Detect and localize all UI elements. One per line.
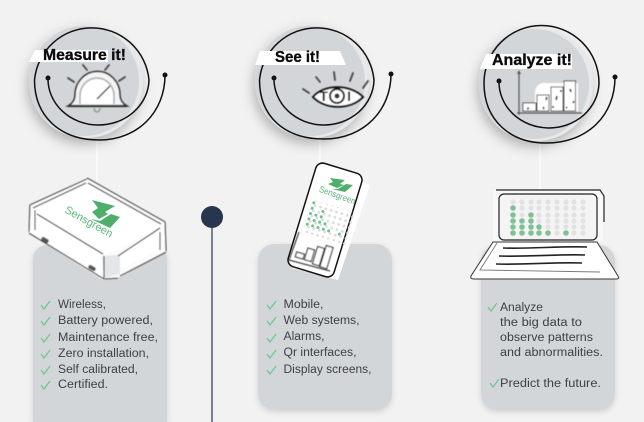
disc xyxy=(255,24,369,138)
mini bar chart xyxy=(289,232,333,271)
spiral arcs xyxy=(34,28,168,140)
box body xyxy=(28,178,166,280)
feature list: see: Display screens, xyxy=(284,364,372,376)
feature list: see: Qr interfaces, xyxy=(284,347,356,359)
icon: eye: I xyxy=(347,88,351,104)
title: Measure it! xyxy=(43,47,126,64)
title banner xyxy=(255,51,346,65)
device: sensor box xyxy=(28,178,166,280)
logo mark xyxy=(91,200,120,228)
icon: eye: T xyxy=(319,88,328,104)
panel: analyze card xyxy=(481,245,615,410)
feature list: see: Web systems, xyxy=(284,315,360,327)
title: See it! xyxy=(275,49,320,66)
feature list: measure: Battery powered, xyxy=(58,315,153,327)
feature list: measure: Certified. xyxy=(58,379,108,391)
see section header xyxy=(255,24,394,139)
analyze section header xyxy=(479,25,618,143)
icon: bar chart xyxy=(517,70,582,115)
device: laptop xyxy=(471,190,619,279)
panel: measure card xyxy=(33,245,167,422)
measure section header xyxy=(29,24,168,140)
feature list: measure xyxy=(41,299,158,391)
panel: see card xyxy=(258,244,392,410)
title banner xyxy=(480,54,572,69)
disc xyxy=(29,24,143,138)
feature list: measure: Maintenance free, xyxy=(58,332,158,344)
title banner xyxy=(29,50,108,62)
feature list: see xyxy=(267,299,372,376)
timeline dot xyxy=(201,206,223,228)
title: Analyze it! xyxy=(492,52,572,69)
feature list: measure: Wireless, xyxy=(58,299,106,311)
feature list: analyze: the big data to xyxy=(500,317,582,329)
timeline line xyxy=(211,226,213,422)
laptop base xyxy=(471,242,619,279)
laptop screen xyxy=(493,190,604,242)
feature list: analyze: and abnormalities. xyxy=(500,347,603,359)
feature list: analyze: Predict the future. xyxy=(500,378,601,390)
feature list: analyze xyxy=(488,302,603,390)
icon: eye xyxy=(303,72,368,107)
disc xyxy=(479,27,593,141)
dot grid xyxy=(302,199,355,245)
feature list: see: Mobile, xyxy=(284,299,324,311)
spiral arcs xyxy=(484,25,618,143)
logo wordmark: Sensgreen xyxy=(318,184,357,206)
feature list: measure: Self calibrated, xyxy=(58,364,138,376)
device: phone xyxy=(286,161,370,280)
spiral arcs xyxy=(260,28,394,139)
feature list: analyze: observe patterns xyxy=(500,332,593,344)
feature list: measure: Zero installation, xyxy=(58,348,149,360)
icon: gauge dome xyxy=(68,65,127,112)
logo wordmark: Sensgreen xyxy=(63,204,115,240)
white connector stems xyxy=(97,139,540,200)
feature list: see: Alarms, xyxy=(284,331,324,343)
logo mark xyxy=(328,178,353,192)
feature list: analyze: Analyze xyxy=(500,302,543,314)
